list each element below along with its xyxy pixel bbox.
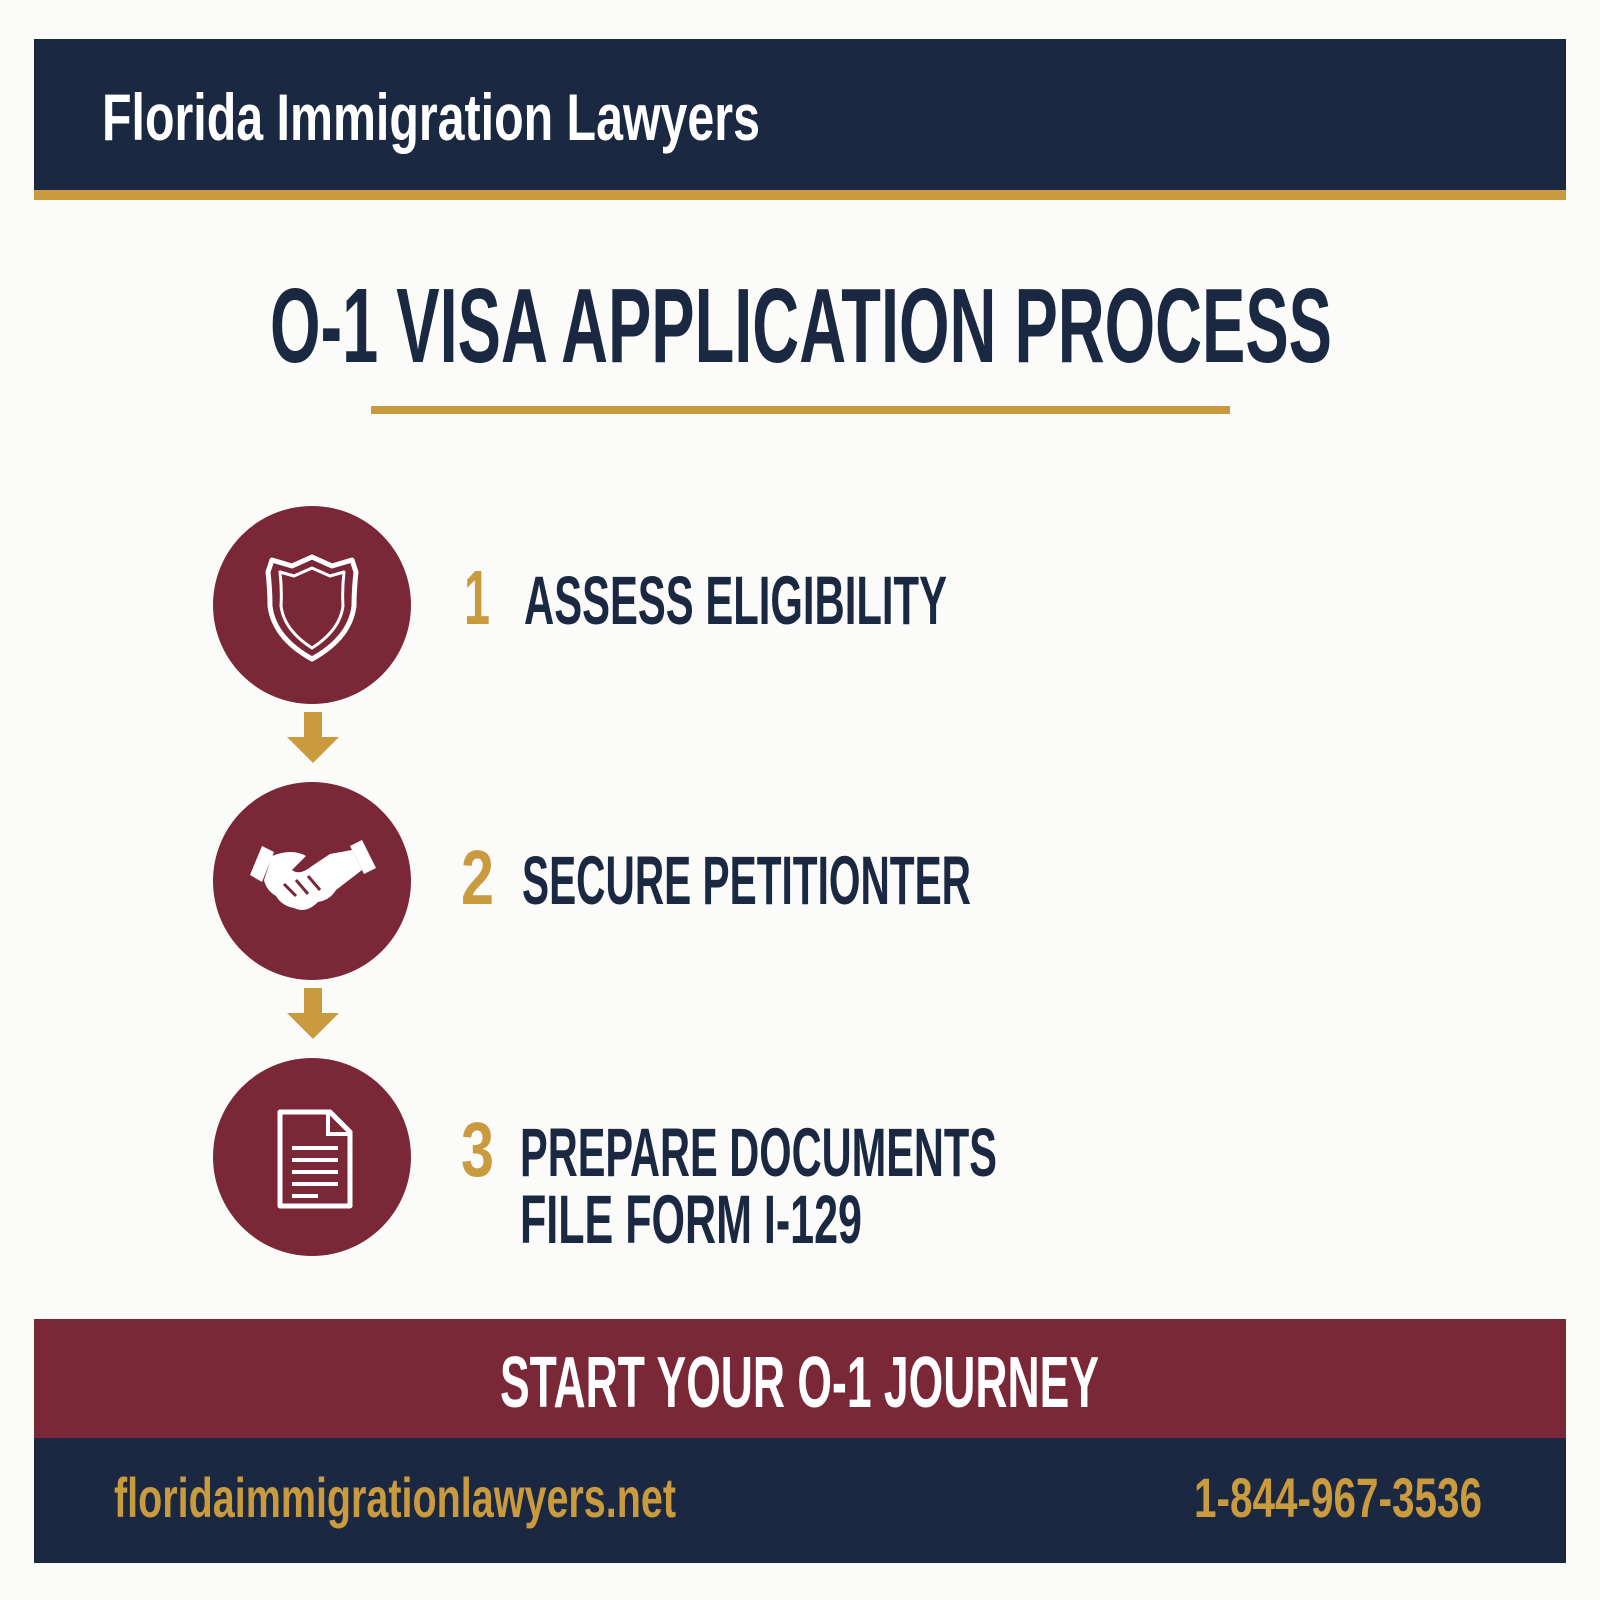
website: floridaimmigrationlawyers.net [114, 1466, 676, 1529]
icon: shield [213, 506, 411, 704]
step 1 label: ASSESS ELIGIBILITY [524, 562, 947, 639]
step 3 label: PREPARE DOCUMENTS [520, 1114, 997, 1191]
icon: document [213, 1058, 411, 1256]
footer [34, 1438, 1566, 1563]
phone: 1-844-967-3536 [1194, 1466, 1482, 1529]
call to action banner [34, 1319, 1566, 1439]
step 3 label: FILE FORM I-129 [520, 1181, 862, 1258]
step 2 label: SECURE PETITIONTER [522, 842, 971, 919]
arrow 2 [287, 988, 339, 1039]
step 2 number: 2 [461, 835, 494, 921]
header banner [34, 39, 1566, 200]
title underline [371, 406, 1230, 414]
step 3 number: 3 [461, 1107, 494, 1193]
step 3 [213, 1058, 997, 1258]
header text: Florida Immigration Lawyers [102, 80, 760, 154]
step 3 label [520, 1114, 997, 1258]
arrow 1 [287, 712, 339, 763]
icon: handshake [213, 782, 411, 980]
step 1 number: 1 [464, 555, 490, 641]
step 1 [213, 506, 947, 704]
call to action banner: START YOUR O-1 JOURNEY [500, 1343, 1099, 1423]
step 2 [213, 782, 971, 980]
